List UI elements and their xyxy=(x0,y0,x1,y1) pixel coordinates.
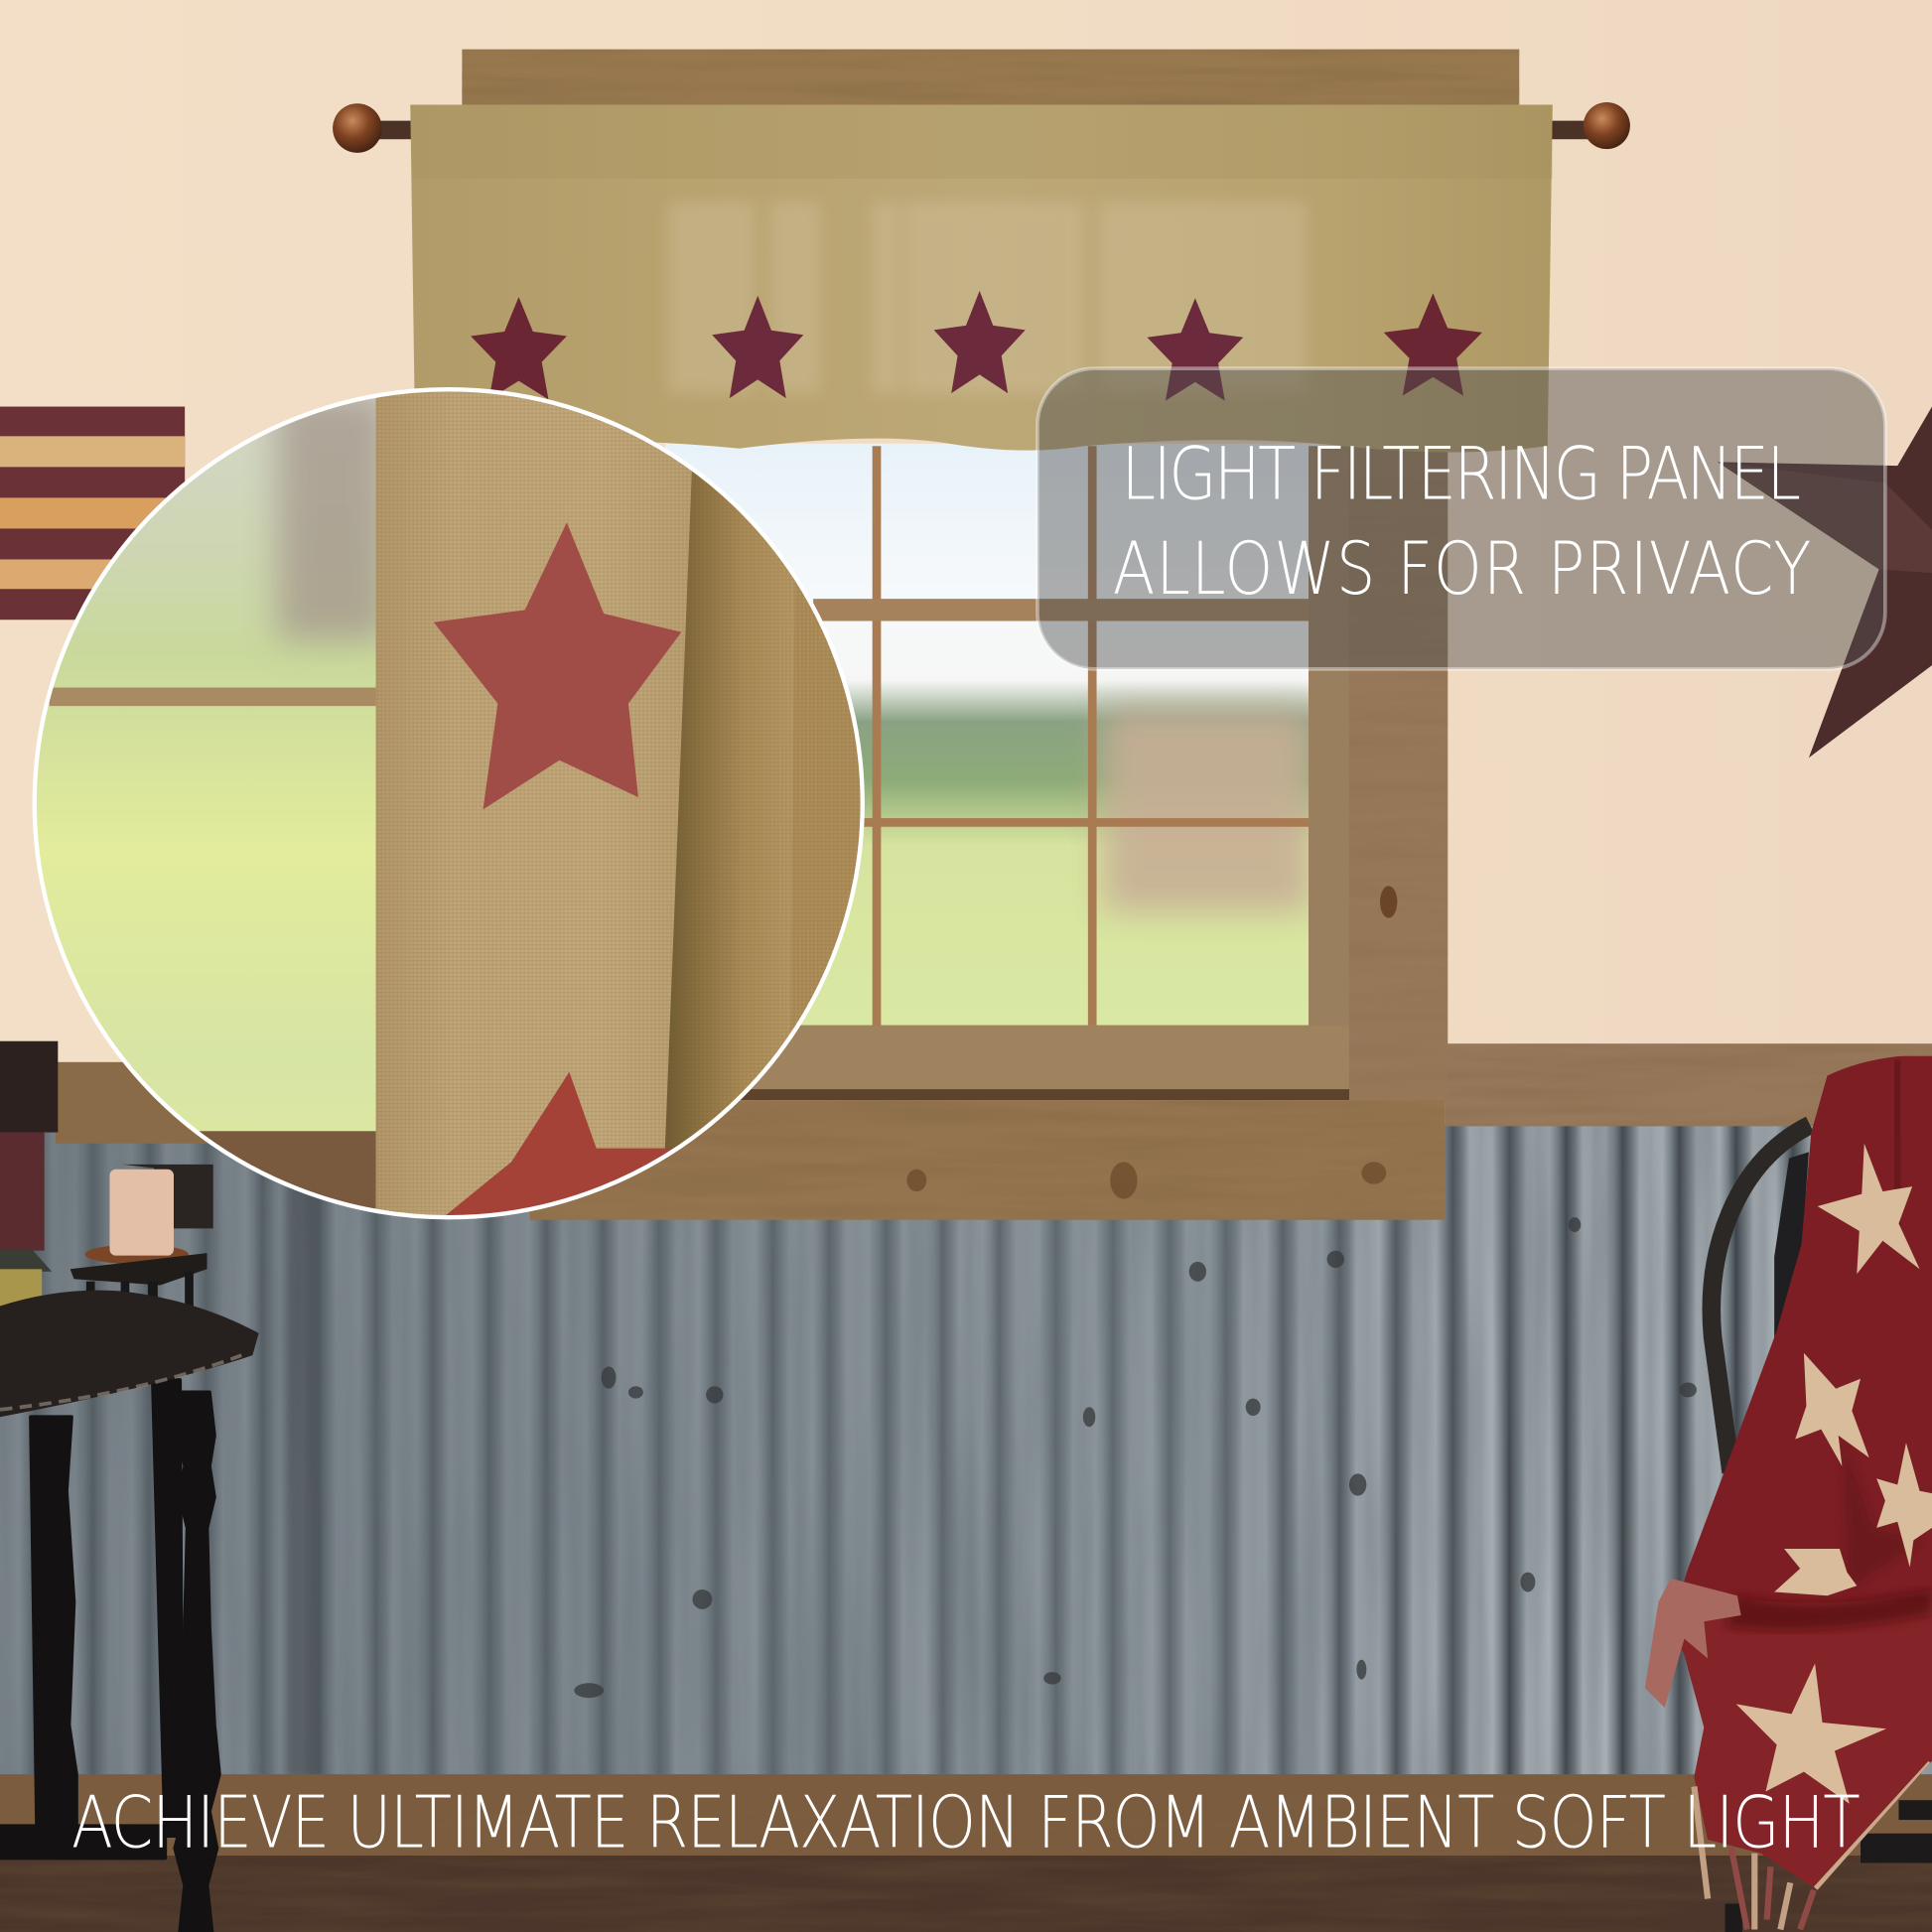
valance curtain xyxy=(410,104,1553,452)
callout text xyxy=(1113,433,1811,613)
window xyxy=(530,444,1448,1220)
chair back xyxy=(1712,1125,1810,1472)
burlap fabric close-up xyxy=(376,382,869,1232)
bottom caption: ACHIEVE ULTIMATE RELAXATION FROM AMBIENT SOFT LIGHT xyxy=(71,1781,1861,1864)
wall star decoration xyxy=(1718,407,1932,758)
window glass and blurred landscape xyxy=(665,444,1318,1035)
blanket fringe xyxy=(1645,1579,1814,1930)
circle interior xyxy=(25,382,869,1232)
blurred window view xyxy=(37,398,375,1209)
black side table xyxy=(0,1291,259,1932)
wall xyxy=(0,0,1932,1232)
valance stars xyxy=(471,291,1482,401)
zoomed detail circle xyxy=(25,382,869,1232)
black and red boxes xyxy=(0,1041,58,1251)
curtain rod with finials xyxy=(333,102,1630,153)
shelf decor xyxy=(0,1041,213,1355)
large red star xyxy=(434,522,681,809)
table legs xyxy=(0,1380,219,1932)
window frame xyxy=(740,444,1448,1103)
table top xyxy=(0,1291,259,1417)
circle border xyxy=(35,389,863,1217)
top mounting board xyxy=(462,50,1519,106)
lower red star xyxy=(446,1072,673,1215)
blanket stars xyxy=(1736,1144,1932,1804)
lower chair rungs xyxy=(1725,1800,1932,1932)
miniature bench back xyxy=(122,1165,213,1228)
light glowing through the fabric xyxy=(668,203,1307,393)
callout text: ALLOWS FOR PRIVACY xyxy=(1113,527,1811,613)
callout panel xyxy=(1037,368,1885,669)
window muntins xyxy=(813,446,1343,1028)
miniature bench seat and legs xyxy=(70,1253,207,1338)
yellow miniature house xyxy=(0,1249,52,1355)
red star blanket xyxy=(1682,1056,1932,1890)
corrugated metal wainscot xyxy=(0,1125,1932,1780)
callout text: LIGHT FILTERING PANEL xyxy=(1121,433,1801,517)
flag wall art xyxy=(0,407,185,620)
candle on plate xyxy=(85,1170,189,1264)
window sill xyxy=(530,1100,1446,1220)
wood chair rail, baseboard and floor xyxy=(0,1043,1932,1932)
